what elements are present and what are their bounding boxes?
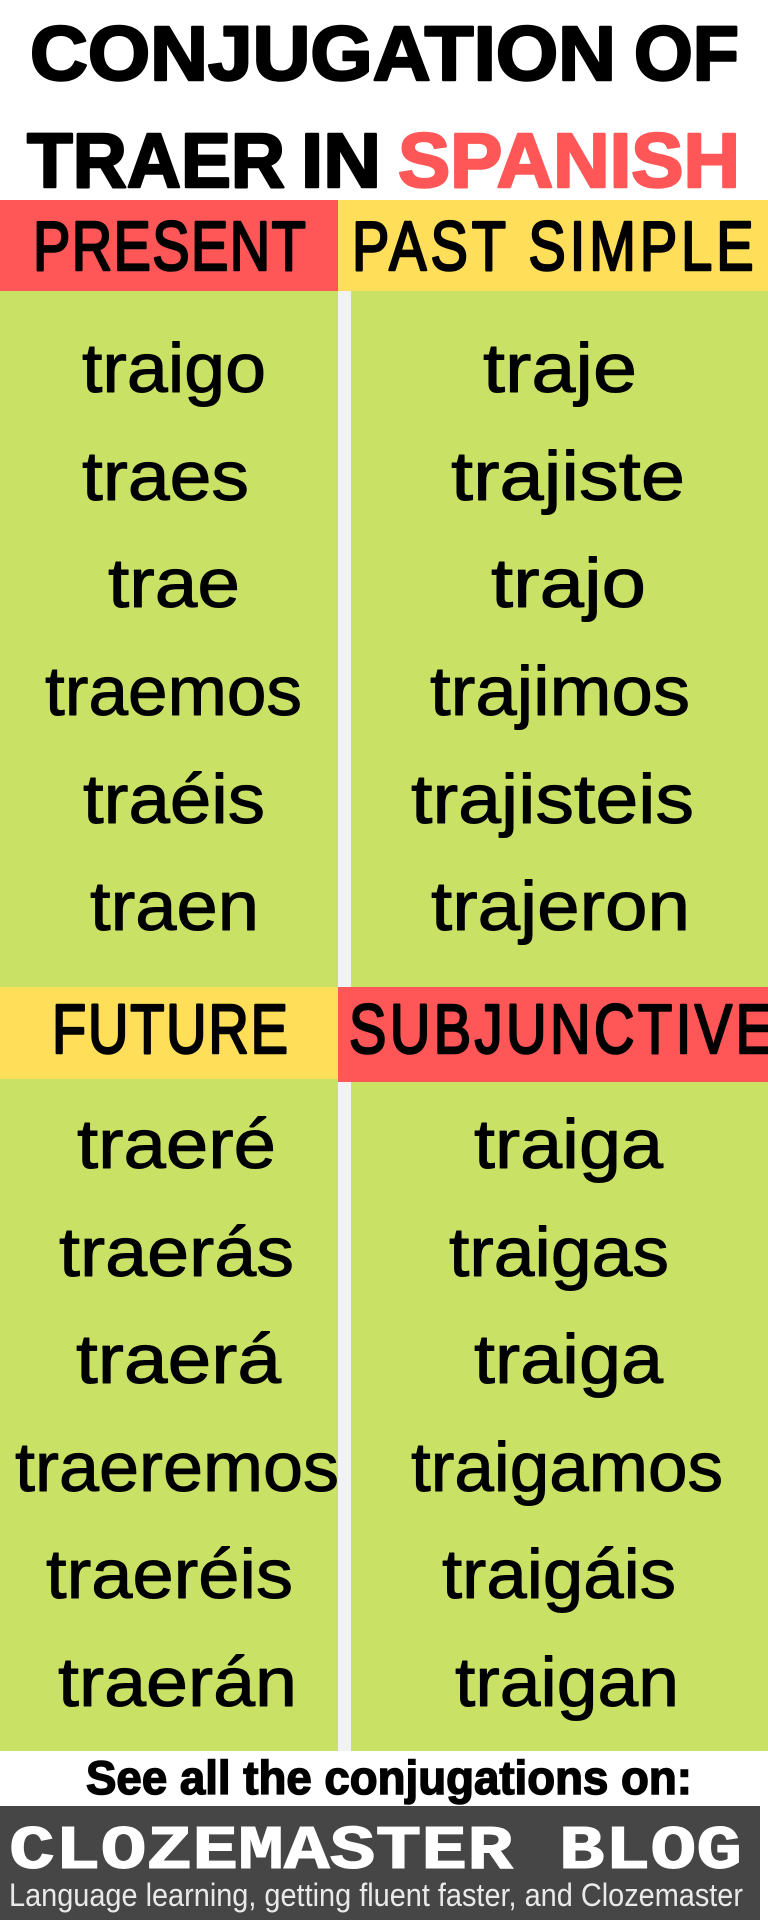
verb list: past simple: trajo bbox=[491, 544, 646, 622]
verb list: past simple: trajiste bbox=[451, 437, 685, 515]
verb list: past simple: traje bbox=[483, 329, 637, 407]
panel: present bbox=[0, 200, 338, 987]
verb list: past simple: trajeron bbox=[431, 867, 690, 945]
verb list: future: traeremos bbox=[15, 1428, 339, 1506]
verb list: subjunctive: traigáis bbox=[442, 1535, 676, 1613]
verb list: past simple: trajimos bbox=[430, 652, 690, 730]
banner logotype: CLOZEMASTER BLOG bbox=[9, 1816, 742, 1887]
heading: present: PRESENT bbox=[33, 208, 306, 285]
verb list: subjunctive: traigan bbox=[455, 1643, 679, 1721]
verb list: future: traeréis bbox=[46, 1535, 293, 1613]
heading: subjunctive: SUBJUNCTIVE bbox=[349, 991, 768, 1068]
heading: future bbox=[0, 987, 338, 1079]
verb list: future: traerá bbox=[76, 1320, 281, 1398]
verb list: present bbox=[0, 291, 338, 987]
verb list: past simple: trajisteis bbox=[411, 760, 694, 838]
verb list: subjunctive bbox=[351, 1082, 768, 1751]
verb list: present: traemos bbox=[45, 652, 302, 730]
title: IN bbox=[301, 118, 381, 204]
verb list: subjunctive: traigamos bbox=[411, 1428, 723, 1506]
title: CONJUGATION bbox=[30, 11, 616, 97]
call to action text: See all the conjugations on: bbox=[86, 1751, 692, 1804]
verb list: subjunctive: traiga bbox=[474, 1320, 663, 1398]
verb list: future: traerás bbox=[59, 1213, 294, 1291]
banner: clozemaster blog bbox=[0, 1806, 760, 1920]
verb list: subjunctive: traigas bbox=[449, 1213, 669, 1291]
verb list: past simple bbox=[351, 291, 768, 987]
verb list: present: trae bbox=[108, 544, 240, 622]
verb list: future: traeré bbox=[77, 1105, 276, 1183]
verb list: present: traes bbox=[82, 437, 249, 515]
title: OF bbox=[634, 11, 739, 97]
verb list: future: traerán bbox=[58, 1643, 297, 1721]
panel: subjunctive bbox=[338, 987, 768, 1751]
heading: future: FUTURE bbox=[52, 991, 288, 1068]
verb list: present: traigo bbox=[82, 329, 266, 407]
heading: past simple: PAST SIMPLE bbox=[352, 208, 754, 285]
title bbox=[27, 11, 740, 204]
verb list: subjunctive: traiga bbox=[474, 1105, 663, 1183]
heading: present bbox=[0, 200, 338, 291]
verb list: present: traen bbox=[90, 867, 259, 945]
title: TRAER bbox=[27, 118, 285, 204]
panel: past simple bbox=[338, 200, 768, 987]
verb list: future bbox=[0, 1079, 339, 1751]
panel: future bbox=[0, 987, 339, 1751]
title: SPANISH bbox=[398, 118, 740, 204]
verb list: present: traéis bbox=[83, 760, 265, 838]
